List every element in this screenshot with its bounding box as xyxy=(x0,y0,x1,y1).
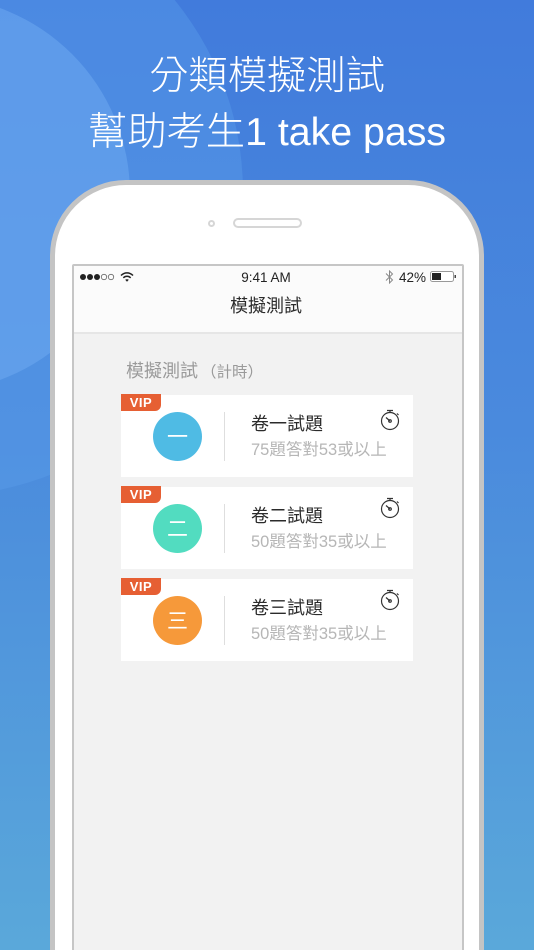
phone body xyxy=(50,180,484,950)
number circle: 一 xyxy=(167,426,188,449)
signal dots xyxy=(80,274,114,280)
battery percent: 42% xyxy=(399,270,426,285)
card title: 卷三試題 xyxy=(251,598,323,618)
screen heading: 模擬測試 xyxy=(230,296,302,316)
icon: stopwatch xyxy=(380,410,400,430)
card subtitle: 50題答對35或以上 xyxy=(251,625,387,643)
VIP badge: VIP xyxy=(130,395,152,410)
phone screen xyxy=(72,264,464,950)
number circle xyxy=(153,412,202,461)
icon: bluetooth xyxy=(386,270,394,284)
icon: battery xyxy=(430,271,456,282)
card subtitle: 75題答對53或以上 xyxy=(251,441,387,459)
VIP badge xyxy=(121,394,161,411)
card: paper one xyxy=(121,395,413,477)
VIP badge: VIP xyxy=(130,579,152,594)
phone camera xyxy=(208,220,215,227)
VIP badge: VIP xyxy=(130,487,152,502)
title: 幫助考生1 take pass xyxy=(88,110,446,154)
card title: 卷一試題 xyxy=(251,414,323,434)
title: 分類模擬測試 xyxy=(149,54,385,98)
card: paper two xyxy=(121,487,413,569)
section label: 模擬測試（計時） xyxy=(126,361,263,381)
status time: 9:41 AM xyxy=(241,270,291,285)
card subtitle: 50題答對35或以上 xyxy=(251,533,387,551)
number circle xyxy=(153,596,202,645)
title xyxy=(88,54,446,154)
icon: wifi xyxy=(120,272,134,282)
number circle: 三 xyxy=(167,610,188,633)
number circle xyxy=(153,504,202,553)
icon: stopwatch xyxy=(380,498,400,518)
phone speaker xyxy=(233,218,302,228)
card: paper three xyxy=(121,579,413,661)
number circle: 二 xyxy=(167,518,188,541)
VIP badge xyxy=(121,486,161,503)
icon: stopwatch xyxy=(380,590,400,610)
VIP badge xyxy=(121,578,161,595)
card title: 卷二試題 xyxy=(251,506,323,526)
status and navigation bar xyxy=(74,266,462,334)
